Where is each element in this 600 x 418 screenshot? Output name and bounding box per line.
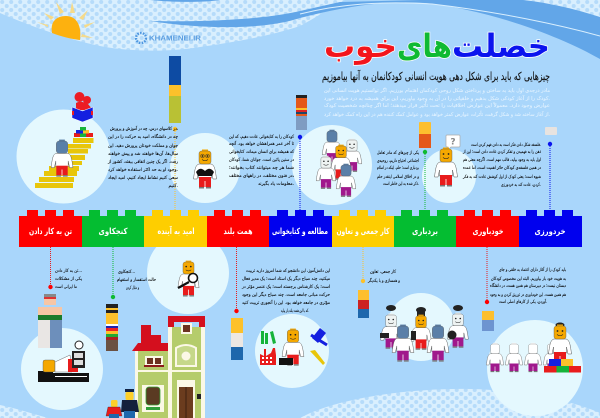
lego bar: امید به آینده	[158, 225, 195, 237]
text: hope: سعی کنیم نشاط ایجاد کنیم، امید ایجاد	[108, 175, 178, 181]
icon: reading child logo	[72, 92, 93, 122]
team of chefs	[380, 305, 468, 362]
text: patience: اجتماعی احتیاج داریم، روحیه‌ی	[377, 159, 419, 164]
text: self belief: هم همین هست. این خودباوری در تزریق کردن و به وجود	[490, 292, 566, 298]
brick stack: reading	[296, 95, 307, 130]
lego bar: خودباوری	[472, 227, 504, 237]
child and graduate figures	[106, 389, 139, 418]
hammer and tool icons	[310, 328, 327, 365]
lego bar	[19, 210, 582, 247]
text: ambition: که با این همت بلند بار بیاید.	[281, 308, 309, 314]
text: self belief: دبستان نیست؛ در دبیرستان هم همین هست، در دانشگاه	[490, 282, 566, 289]
title: های	[397, 27, 452, 65]
text: wisdom: فلسفه شکل دادن فکر است به دادن فهم کردن است.	[471, 142, 541, 148]
connector dots	[48, 127, 552, 313]
text: patience: و در اخلاق اسلامی اینقدر حلم	[377, 174, 419, 180]
lego bar: مطالعه و کتابخوانی	[272, 227, 328, 237]
lego bar: همت بلند	[224, 227, 253, 237]
text: wisdom: ذهن را به فهمیدن و تفکر کردن عادت دادن است؛ این از	[462, 149, 541, 155]
text: reading: در فنون مختلف، در راههای مختلف،	[229, 174, 294, 179]
figure with magnifier	[178, 261, 199, 296]
brick stack: teamwork	[358, 290, 369, 318]
text: hope: کنیم.	[168, 183, 178, 189]
lego bar: بردباری	[412, 227, 438, 237]
text: hope: جوان و مملکت خودتان پرورش دهید. این	[108, 143, 178, 149]
text: work: ما ایرانی است	[55, 285, 77, 290]
text: work: تن به کار دادن...	[55, 268, 82, 274]
figure with case	[279, 329, 304, 366]
figure thinking	[434, 148, 458, 186]
bottom wave right	[300, 389, 600, 418]
lego bar: تن به کار دادن	[29, 227, 72, 237]
question bubble: ?	[450, 138, 456, 148]
leader with followers	[486, 322, 581, 372]
text: hope: در کلاسهای درس، چه در آموزش و پرورش،	[110, 126, 178, 132]
brick stack: curiosity	[106, 304, 118, 351]
books and factory icons	[260, 331, 276, 365]
text: reading: کودکان را به کتابخوانی عادت دهیم، که این	[229, 134, 295, 140]
text: patience	[377, 150, 420, 187]
text: ambition: این دانش‌آموز، این دانشجو که شما امروز دارید تربیت	[246, 268, 330, 274]
text: work	[55, 268, 83, 290]
sun	[37, 2, 95, 40]
logo	[136, 33, 202, 43]
top wave left	[0, 0, 345, 51]
white swoosh line	[300, 3, 600, 36]
brick stack: patience	[419, 122, 431, 148]
brick stack: ambition	[231, 318, 243, 360]
text: wisdom: کردن، عادت کند به خردورزی.	[501, 182, 541, 188]
stairs	[35, 138, 94, 188]
top stripe	[150, 0, 220, 2]
text: hope: رفت. اگر یک چنین اتفاقی بیفتد، کشور از	[107, 158, 178, 165]
group of figures	[316, 130, 362, 197]
brick: wisdom	[545, 127, 557, 135]
text: curiosity: حالت استفسار و استفهام	[117, 278, 156, 283]
house	[132, 316, 205, 418]
text: wisdom: در همین فلسفه‌ی کودکان حائز اهمیت است، اما عمده	[463, 165, 541, 171]
text: hope	[107, 126, 178, 189]
brick stack: hope	[169, 56, 181, 123]
text: patience: بردباری است؛ حلم. اینکه در اسلام	[377, 165, 419, 171]
text: teamwork: و همسازی و با یکدیگر	[367, 277, 400, 284]
question bubble	[446, 135, 460, 150]
text: wisdom	[462, 142, 541, 188]
title: خصلت	[452, 27, 550, 65]
text: hope: وجود او به حد اکثر استفاده خواهد کرد.	[108, 167, 178, 173]
text: self belief: آوردن، یکی از کارهای اصلی است.	[499, 299, 547, 305]
text: ambition: مؤثری در جامعه خواهد بود. این را آنجوری تربیت کنید	[242, 300, 330, 306]
text: ambition: حرکت مبانی جامعه است. چند صباح دیگر این وجود	[242, 291, 330, 298]
text: self belief	[490, 266, 566, 305]
lego bar: کنجکاوی	[98, 227, 128, 237]
text: reading: تا آخر عمر همراهشان خواهد بود. آنچه	[229, 141, 295, 147]
text: ambition	[241, 268, 330, 314]
text: wisdom: اول باید به وجود بیاید، قالب مهم است. اگرچه معنی هم	[463, 156, 541, 163]
top right dots	[523, 0, 600, 17]
brick stack: self belief	[482, 311, 494, 331]
intro paragraph: عوارض وجود دارد. معمولاً این عوارض اخلاقیات را تحت تأثیر قرار میدهند؛ اما اگر چنانچه شخصیت کودک	[324, 101, 550, 109]
text: wisdom: شیوه است؛ یعنی کودک از اول کوشش عادت کند به فکر	[462, 173, 541, 180]
text: hope: سال‌ها، آن‌ها خواهند شد و پیش خواهند	[108, 151, 178, 157]
title	[324, 27, 550, 65]
text: self belief: به هویت خود بار بیاوریم. البته این مخصوص کودکان	[491, 276, 566, 282]
text: reading	[229, 134, 295, 187]
lego bar: کار جمعی و تعاون	[336, 227, 390, 237]
text: reading: معلومات یاد بگیرند.	[258, 180, 294, 187]
sleeping figure	[38, 341, 89, 382]
text: curiosity	[117, 269, 156, 291]
text: patience: یکی از چیزهای که مادر تعامل	[377, 150, 420, 156]
title: خوب	[324, 27, 397, 65]
text: teamwork: کار جمعی، تعاون	[370, 269, 397, 275]
text: patience: ذکر شده به این خاطر است.	[383, 181, 419, 187]
lego bar: خردورزی	[534, 227, 566, 237]
text: hope: چه در دانشگاه، امید به حرکت را در این	[108, 133, 178, 140]
logo: KHAMENEI.IR	[149, 34, 202, 42]
text: curiosity: و دنبال کردن	[126, 285, 139, 291]
text: self belief: باید کودک را از آغاز دارای اعتماد به خلقی و جای	[499, 266, 566, 273]
brick stack: work	[38, 294, 62, 348]
text: teamwork	[367, 269, 400, 284]
intro paragraph: مادر درجه‌ی اول باید به ساختن و پرداختن شکل روحی کودکمان اهتمام بورزیم. اگر توانستیم هویت انسانی این	[324, 87, 550, 94]
figure on stairs	[51, 140, 73, 177]
circles	[16, 110, 583, 416]
dotted connectors	[50, 129, 550, 311]
intro paragraph	[324, 87, 550, 118]
text: work: یکی از مشکلات	[55, 276, 83, 282]
text: reading: شما هر چه میتوانند کتاب بخوانند؛	[229, 165, 294, 171]
top wave dark swoosh	[150, 0, 600, 59]
intro paragraph: کودک را از آغاز کودکی شکل بدهیم و خلقیاتی را در آن به وجود بیاوریم، این برای همیشه به درد خواهد خورد.	[324, 95, 550, 102]
bricks on stairs	[74, 127, 93, 137]
text: reading: در سنین پائین است. جوانان شما، کودکان	[229, 157, 294, 163]
intro paragraph: از آغاز ساخته شد و شکل گرفت، تأثرات عوارض کمتر خواهد بود و عوامل کمک کننده هم در این راه کمک خواهد کرد.	[324, 110, 550, 118]
text: ambition: میکنید، چند صباح دیگر یک استاد است؛ یک مدیر فعال	[242, 275, 330, 282]
text: ambition: است؛ یک کارشناس برجسته است؛ یک عنصر مؤثر در	[241, 284, 330, 290]
bottom wave left	[0, 405, 48, 418]
figure reading	[194, 150, 216, 188]
text: reading: که همیشه برای انسان میماند، کتابخوانی	[229, 149, 295, 155]
text: curiosity: کنجکاوی...	[118, 269, 135, 275]
